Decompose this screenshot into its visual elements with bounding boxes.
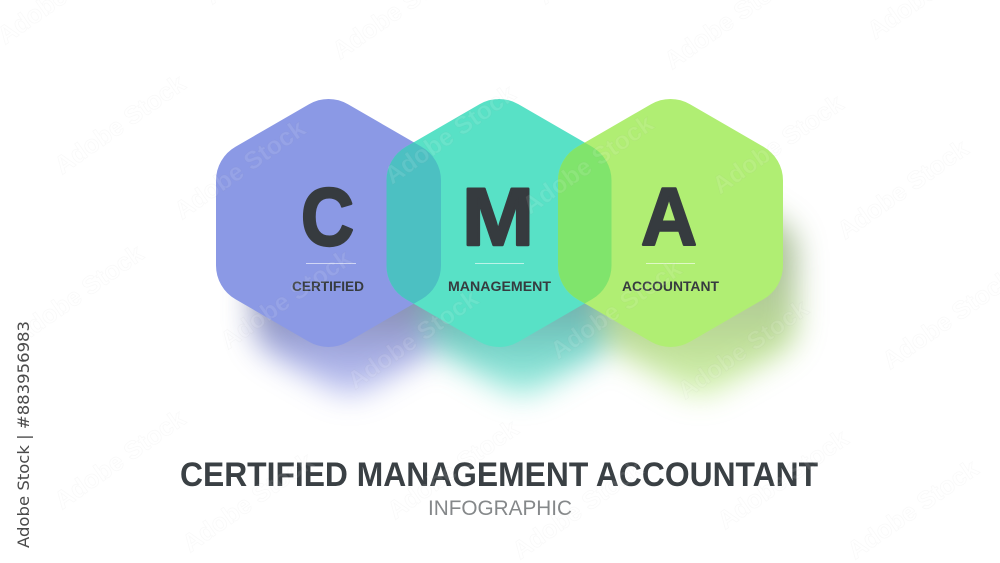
stock watermark pattern: Adobe Stock (379, 79, 521, 190)
divider: certified (306, 263, 356, 264)
subtitle: INFOGRAPHIC (428, 496, 572, 520)
stock watermark pattern: Adobe Stock (177, 447, 319, 558)
overlap: management and accountant (558, 142, 612, 304)
shadow: certified hexagon (253, 181, 447, 395)
panel: CMA hexagon diagram (216, 99, 783, 347)
stock watermark pattern: Adobe Stock (215, 244, 357, 355)
stock watermark pattern: Adobe Stock (842, 454, 984, 563)
label: accountant: ACCOUNTANT (622, 279, 720, 294)
stock watermark pattern: Adobe Stock (707, 89, 849, 200)
overlap: certified and management (386, 142, 441, 304)
stock watermark pattern: Adobe Stock (507, 454, 649, 563)
shadow: accountant hexagon (603, 181, 797, 395)
shadow: management hexagon (425, 181, 619, 395)
stock watermark pattern: Adobe Stock (49, 404, 191, 515)
divider: accountant (646, 263, 695, 264)
letter C: C (301, 172, 354, 263)
stock watermark pattern: Adobe Stock (712, 424, 854, 535)
divider: management (475, 263, 524, 264)
stock watermark pattern: Adobe Stock (49, 69, 191, 180)
stock watermark pattern: Adobe Stock (342, 284, 484, 395)
letter M: M (462, 172, 534, 263)
stock watermark pattern: Adobe Stock (382, 414, 524, 525)
title: CERTIFIED MANAGEMENT ACCOUNTANT (180, 456, 818, 494)
hexagon: management (386, 99, 612, 347)
letter A: A (641, 172, 697, 263)
stock watermark pattern: Adobe Stock (672, 294, 814, 405)
stock credit vertical text: Adobe Stock | #883956983 (14, 321, 33, 548)
stock watermark pattern: Adobe Stock (832, 134, 974, 245)
hexagon: certified (216, 99, 441, 347)
stock watermark pattern: Adobe Stock (7, 239, 149, 350)
stock watermark pattern: Adobe Stock (545, 254, 687, 365)
hexagon: accountant (558, 99, 783, 347)
stock watermark pattern: Adobe Stock (169, 114, 311, 225)
label: management: MANAGEMENT (448, 279, 552, 294)
hexagon drop shadows (253, 181, 797, 395)
stock watermark pattern: Adobe Stock (517, 109, 659, 220)
label: certified: CERTIFIED (292, 279, 364, 294)
